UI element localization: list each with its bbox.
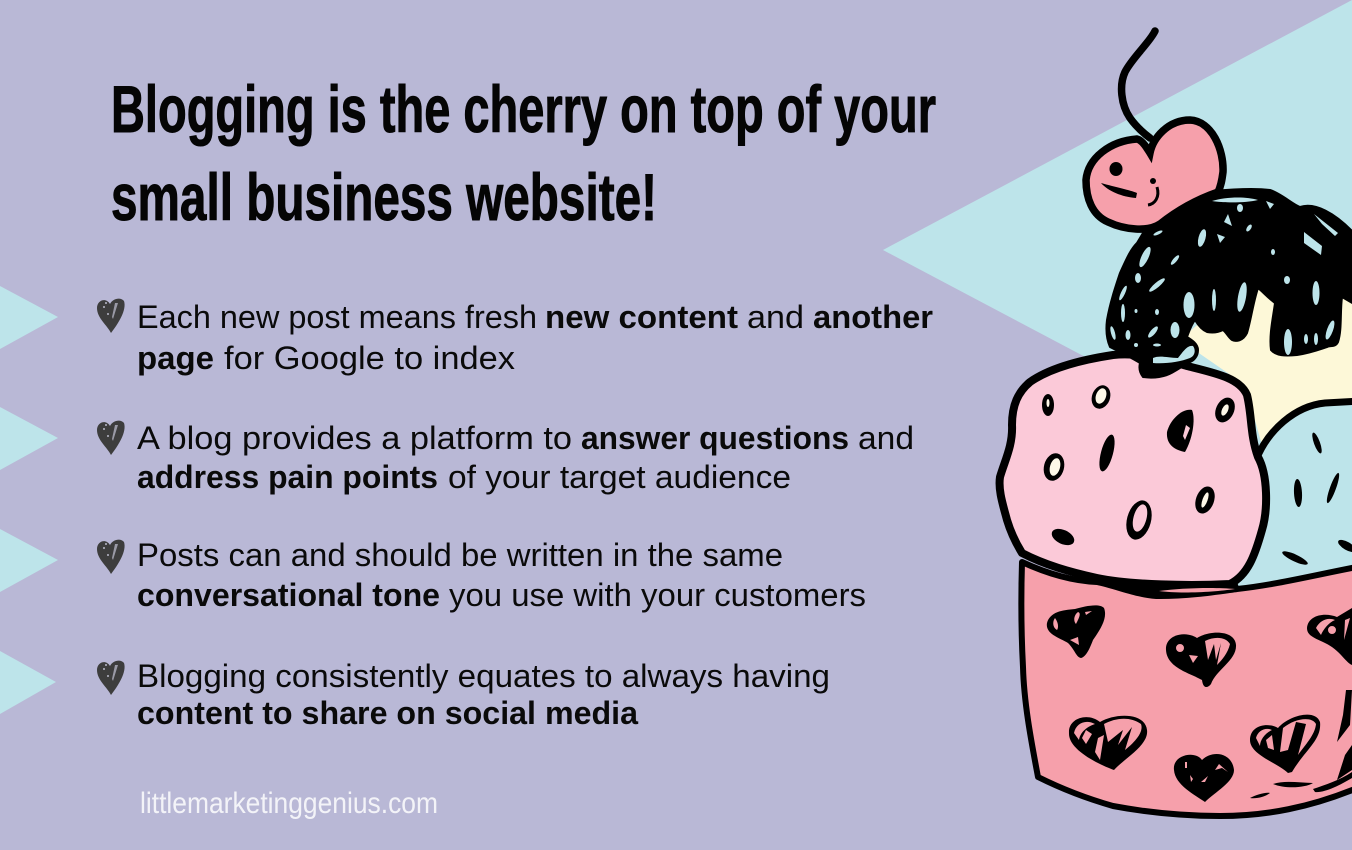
cherry stem <box>1122 31 1155 138</box>
cherry <box>1086 120 1223 229</box>
cup heart 6 <box>1250 715 1320 773</box>
pink scoop <box>1000 354 1266 585</box>
illustration: ice cream sundae <box>1000 31 1352 816</box>
bullet 1: for Google to index <box>224 340 515 376</box>
cup heart 3 <box>1307 608 1352 665</box>
title: Blogging is the cherry on top of your <box>111 72 936 146</box>
bullet 3 <box>97 537 866 613</box>
cup heart 5 <box>1174 754 1234 802</box>
bullet 1: and <box>747 299 804 335</box>
bullet 2: and <box>858 420 914 456</box>
bullet 4 <box>97 658 830 731</box>
bullet 1: Each new post means fresh <box>137 299 537 335</box>
bullet 2 <box>97 420 914 495</box>
cup heart 4 <box>1069 716 1147 770</box>
bullet 2: A blog provides a platform to <box>137 420 572 456</box>
title <box>111 72 936 234</box>
bullet 3: conversational tone <box>137 577 440 613</box>
cup heart 2 <box>1166 633 1236 687</box>
bullet 4: content to share on social media <box>137 695 638 731</box>
bullet 2: answer questions <box>581 420 849 456</box>
large pale blue triangle <box>883 0 1352 498</box>
left pale blue arrows <box>0 286 58 714</box>
yellow scoop <box>1180 270 1352 445</box>
bullet 1 <box>97 299 933 376</box>
bullet 2: address pain points <box>137 459 438 495</box>
bullet 2: of your target audience <box>448 459 791 495</box>
bullet 3: you use with your customers <box>449 577 866 613</box>
title: small business website! <box>111 160 657 234</box>
cup <box>1021 562 1352 816</box>
blue scoop <box>1220 401 1352 595</box>
bullet 3: Posts can and should be written in the same <box>137 537 783 573</box>
bullet 4: Blogging consistently equates to always having <box>137 658 830 694</box>
chocolate sauce <box>1106 189 1352 378</box>
bullet 1: another <box>813 299 933 335</box>
bullet 1: new content <box>545 299 738 335</box>
bullet 1: page <box>137 340 214 376</box>
cup heart 1 <box>1047 605 1105 658</box>
website footer: littlemarketinggenius.com <box>140 787 438 820</box>
